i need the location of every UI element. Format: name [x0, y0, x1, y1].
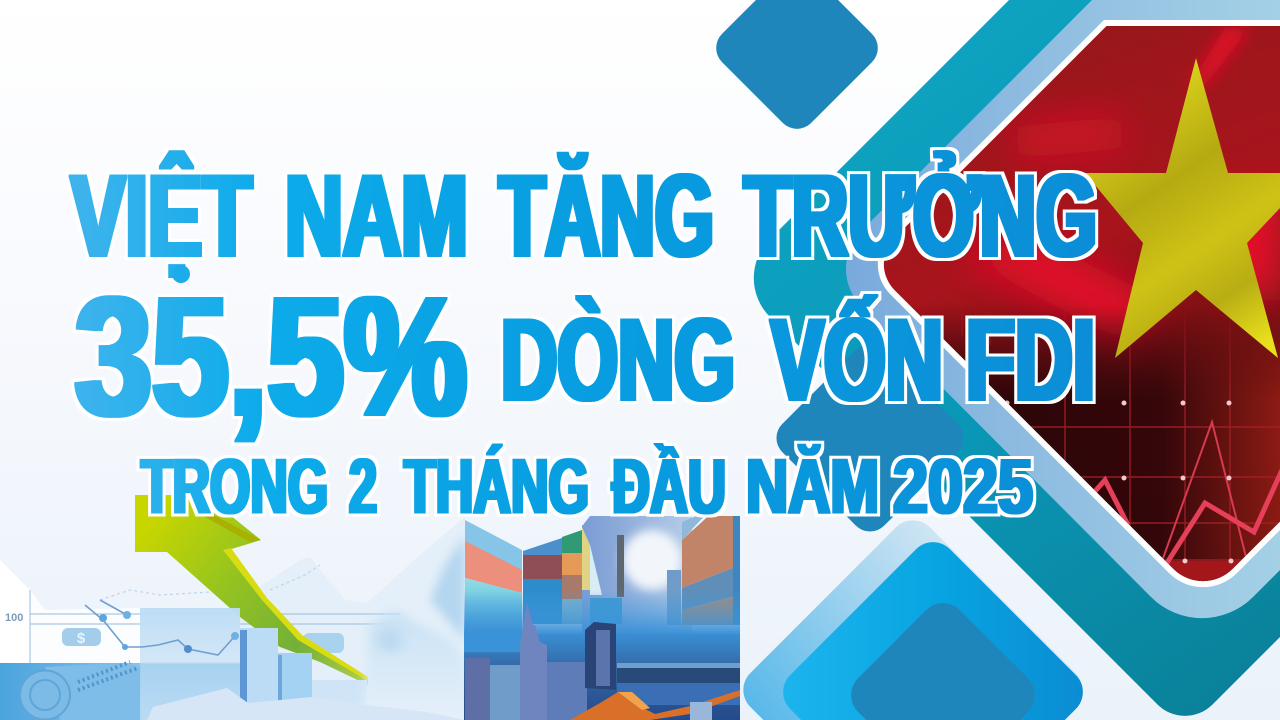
- pale hill backdrop: [240, 517, 465, 720]
- chart dots: [1004, 400, 1234, 564]
- title line 1: [71, 150, 1097, 281]
- faded panel: [140, 608, 240, 720]
- title line 3: NĂM: [746, 442, 879, 530]
- diamond: top blue: [716, 0, 878, 129]
- teal haze: [464, 637, 521, 652]
- river lights: [570, 690, 740, 720]
- panel: Vietnam flag and chart: [860, 20, 1280, 591]
- city and containers photo: [464, 510, 740, 720]
- clouds: [622, 530, 682, 590]
- white chart backdrop: [30, 590, 140, 663]
- chart baseline band: [1169, 561, 1240, 582]
- highlight number: 35,5%: [75, 262, 467, 452]
- flag red base: [860, 20, 1280, 590]
- collage: faded economy montage: [0, 495, 740, 720]
- chevron: light blue band: [846, 0, 1280, 618]
- container stack small: [590, 598, 622, 624]
- flag streak: [1190, 28, 1250, 85]
- stock chart background: [916, 310, 1280, 582]
- white triangle: [0, 560, 30, 663]
- faded top chart line: [100, 565, 320, 600]
- title line 3: ĐẦU: [612, 442, 726, 530]
- title line 3: THÁNG: [404, 442, 589, 530]
- title line 3: TRONG: [141, 442, 328, 530]
- title line 3: 2025: [893, 442, 1033, 530]
- diamond: middle blue: [783, 542, 1083, 720]
- left blue band: [0, 663, 141, 720]
- faded line chart: [85, 600, 239, 655]
- worker photo: [360, 535, 465, 720]
- title line 1: TĂNG: [499, 150, 714, 281]
- chart thick line: [1090, 470, 1280, 566]
- diamond group: bottom: [743, 520, 1083, 720]
- chevron: teal band: [754, 0, 1280, 716]
- flag star: [1085, 58, 1280, 358]
- title line 3: [141, 442, 1033, 530]
- chart grid: [961, 312, 1280, 561]
- title line 2: DÒNG: [501, 294, 735, 425]
- title line 2: [501, 294, 1095, 425]
- chart thin line: [1162, 418, 1246, 560]
- title line 2: FDI: [966, 294, 1095, 425]
- flag outline: [878, 20, 1280, 587]
- foreground white hill: [147, 688, 465, 720]
- blue fade: [464, 590, 740, 635]
- diacritic dot: [172, 265, 190, 283]
- diamond: mid blue behind title: [768, 336, 972, 540]
- title line 2: VỐN: [771, 294, 943, 425]
- flag highlights: [950, 115, 1280, 345]
- dollar badge: [62, 628, 101, 647]
- axis label: 100: [5, 612, 23, 624]
- pipe roll: [20, 662, 141, 720]
- title line 3: 2: [349, 442, 377, 530]
- title line 1: NAM: [285, 150, 468, 281]
- arrow highlight: [223, 548, 368, 681]
- container stack centre: [523, 527, 602, 624]
- green growth arrow: [135, 495, 368, 685]
- sky: [582, 510, 692, 635]
- faded chart axes: [30, 590, 400, 663]
- arrow body: [135, 495, 368, 685]
- dollar badge: $: [77, 630, 86, 647]
- title: [71, 150, 1097, 530]
- city lower: [464, 634, 740, 720]
- title line 1: VIỆT: [71, 150, 252, 281]
- crane: [617, 535, 624, 597]
- faded bars: [240, 628, 367, 710]
- second badge: [303, 633, 344, 653]
- container stack left: [465, 520, 522, 632]
- diamond: inner blue: [851, 603, 1035, 720]
- container stack right: [667, 510, 740, 625]
- diamond: outer light: [743, 520, 1083, 720]
- title line 1: TRƯỞNG: [744, 150, 1097, 281]
- arrow head edge: [196, 512, 261, 542]
- skyline: [465, 602, 740, 720]
